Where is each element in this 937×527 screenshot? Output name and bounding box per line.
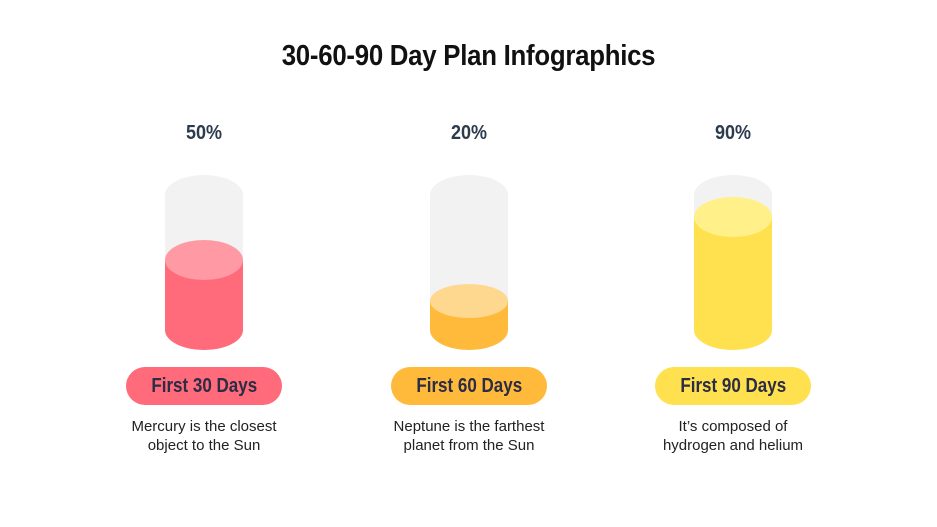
description 1: Mercury is the closest [131, 418, 277, 435]
percent 20: 20% [451, 122, 487, 144]
percent 50: 50% [186, 122, 222, 144]
description 2: planet from the Sun [404, 437, 534, 454]
description 1: object to the Sun [148, 437, 260, 454]
label pill 2: First 60 Days [416, 374, 522, 396]
description 1 [131, 418, 277, 454]
label pill 1: First 30 Days [151, 374, 257, 396]
description 3: It’s composed of [679, 418, 787, 435]
title: 30-60-90 Day Plan Infographics [282, 40, 655, 72]
label pill 1 [126, 367, 282, 405]
percent 90: 90% [715, 122, 751, 144]
cylinder 2 [430, 175, 508, 350]
cylinder 1 [165, 175, 243, 350]
description 2 [394, 418, 544, 454]
description 2: Neptune is the farthest [394, 418, 544, 435]
label pill 3 [655, 367, 811, 405]
description 3: hydrogen and helium [663, 437, 803, 454]
label pill 3: First 90 Days [680, 374, 786, 396]
label pill 2 [391, 367, 547, 405]
description 3 [663, 418, 803, 454]
cylinder 3 [694, 175, 772, 350]
